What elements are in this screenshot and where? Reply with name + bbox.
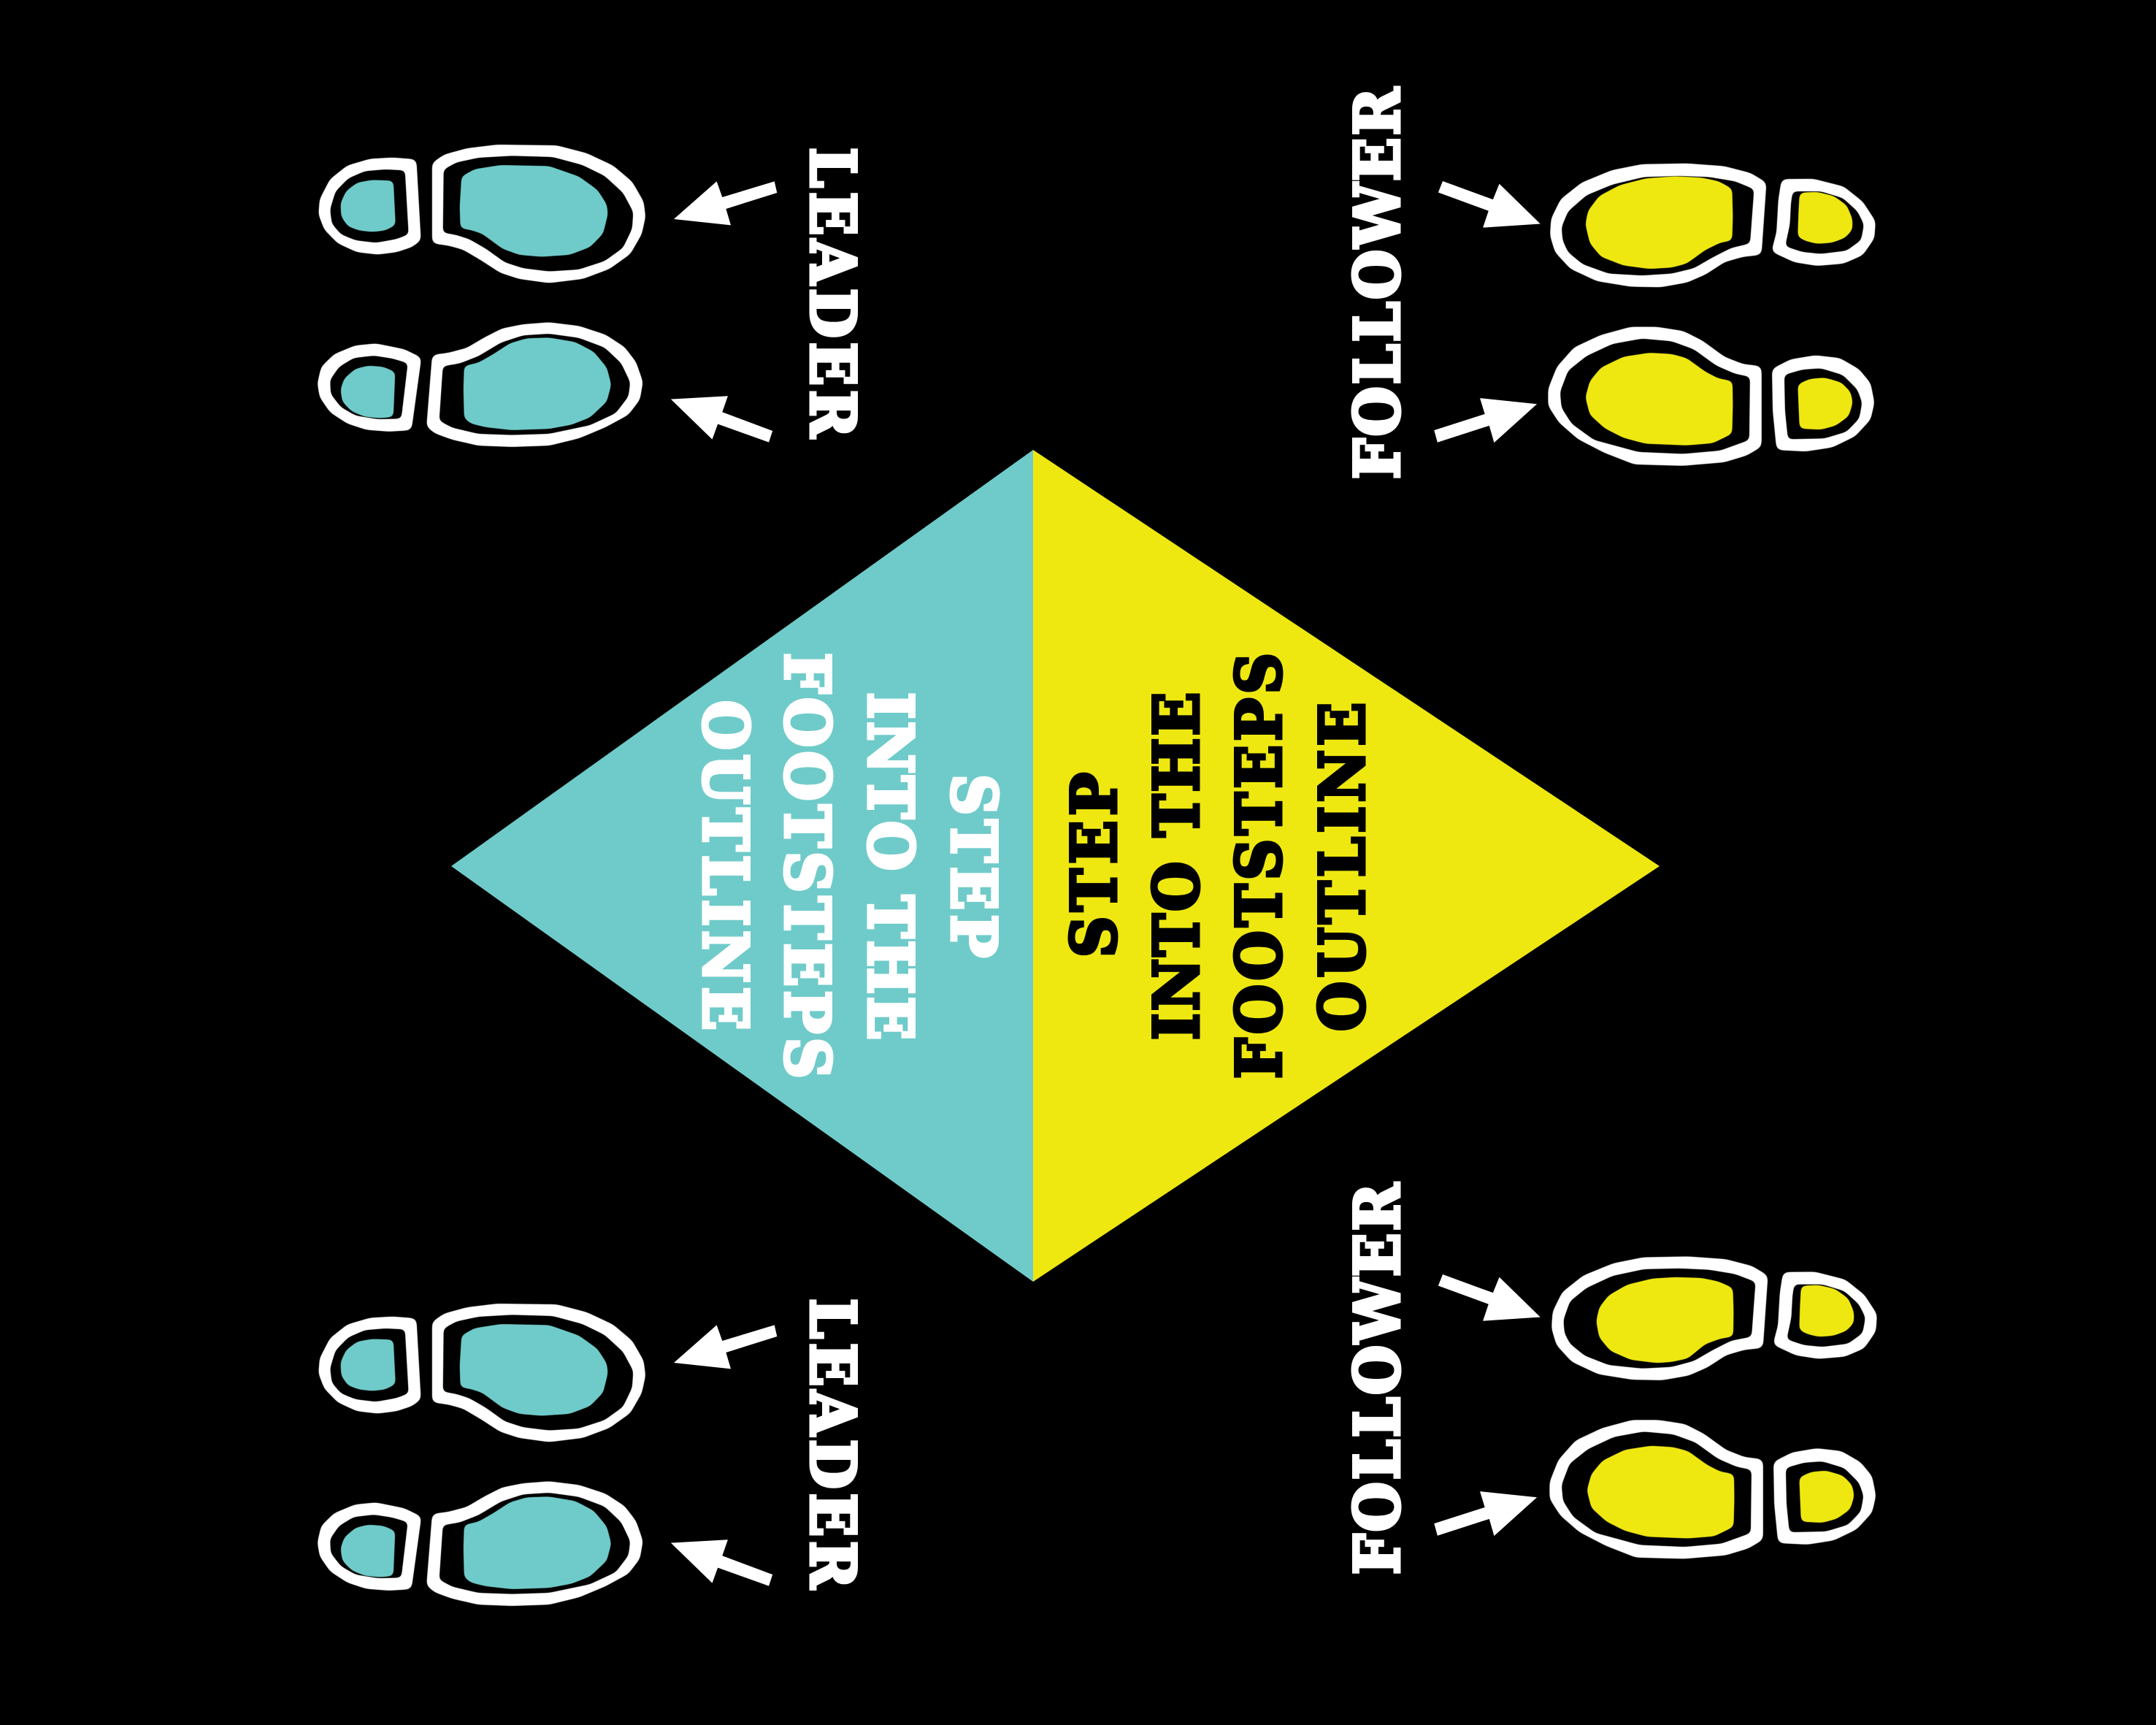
top follower label: FOLLOWER	[1342, 88, 1414, 479]
top leader arrows	[671, 181, 777, 443]
bottom follower label: FOLLOWER	[1342, 1183, 1414, 1575]
bottom leader footprints	[319, 1305, 644, 1604]
leader heading text block: FOOTSTEPS	[770, 653, 843, 1079]
bottom follower arrows	[1434, 1274, 1541, 1536]
follower heading text block: INTO THE	[1141, 692, 1213, 1040]
top leader label: LEADER	[796, 148, 868, 438]
follower heading text block: STEP	[1059, 773, 1131, 957]
bottom leader label: LEADER	[796, 1298, 868, 1589]
follower heading text block	[1059, 653, 1379, 1079]
diamond: yellow follower half	[1033, 450, 1660, 1282]
leader heading text block: OUTLINE	[688, 700, 761, 1030]
top follower footprints	[1549, 165, 1874, 464]
leader heading text block: INTO THE	[853, 692, 926, 1040]
top follower arrows	[1434, 181, 1541, 443]
leader heading text block	[688, 653, 1009, 1079]
top leader footprints	[319, 146, 644, 445]
leader heading text block: STEP	[937, 774, 1009, 957]
follower heading text block: OUTLINE	[1307, 703, 1379, 1031]
bottom follower footprints	[1551, 1258, 1876, 1557]
bottom leader arrows	[671, 1325, 777, 1586]
follower heading text block: FOOTSTEPS	[1224, 653, 1296, 1079]
diamond: teal leader half	[451, 450, 1033, 1282]
